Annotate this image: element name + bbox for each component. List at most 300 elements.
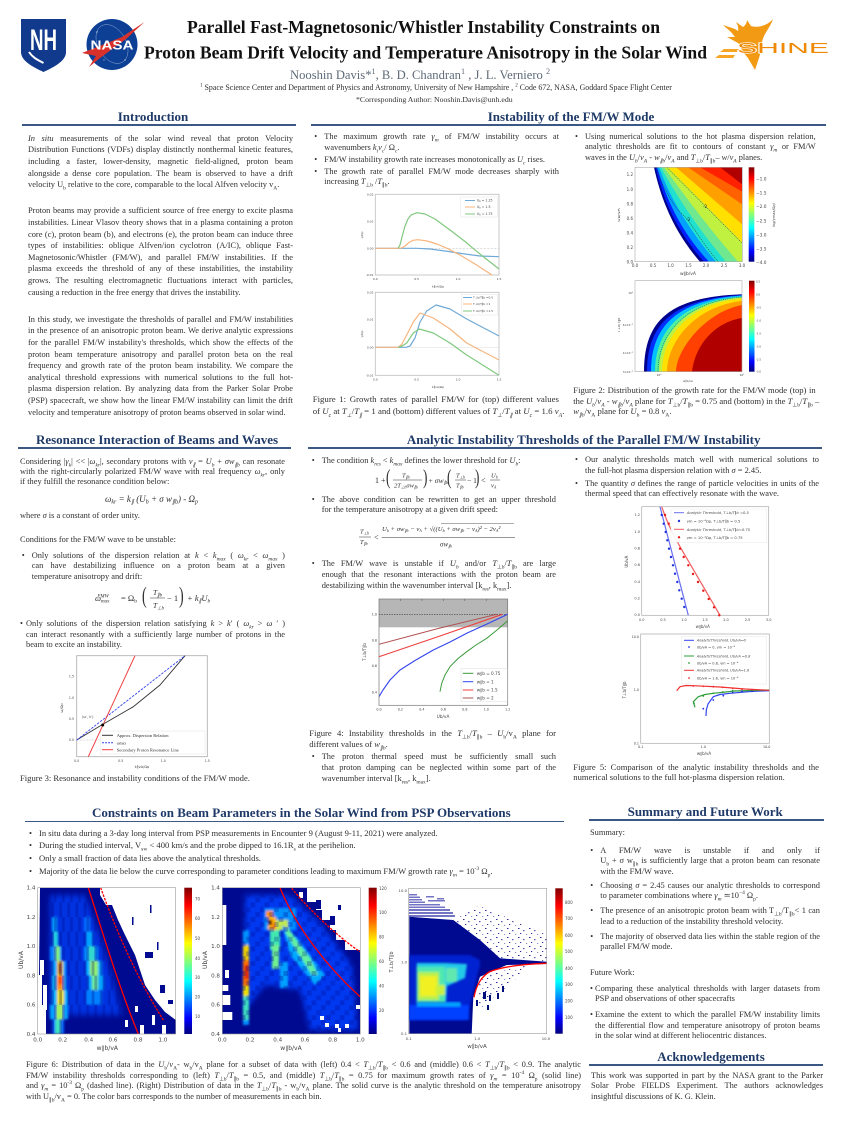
chart: figure 6 middle, 2D histogram: 0.2 (246, 1038, 254, 1044)
plot: anisotropy vs w comparison: 10.0 (763, 745, 770, 749)
formula: omega max: ω (95, 593, 101, 603)
text: k above k-prime bullet: can interact resonantly with a sufficiently large number of protons in the (26, 630, 285, 639)
formula: omega max: b (208, 598, 211, 604)
plot: bottom panel, varying anisotropy: 0.0 (373, 378, 378, 382)
text: future work label: Future Work: (590, 968, 635, 977)
plot: top heat map, Ub vs w: 2.0 (703, 263, 710, 268)
chart: figure 4 instability thresholds: 1.0 (372, 612, 377, 616)
formula: resonance condition: p (194, 500, 198, 506)
formula: resonance condition (105, 494, 198, 506)
formula: omega max: ∥b (157, 592, 163, 598)
text: analytic agreement bullets (576, 455, 819, 498)
formula: upper threshold: T (360, 539, 364, 546)
logo: UNH shield (21, 19, 66, 72)
colorbar: right: 800 (565, 900, 573, 905)
text: thermal speed bullet: that proton damping can be neglected within some part of the (322, 763, 556, 772)
plot: Ub vs w comparison: 0.0 (634, 613, 640, 617)
plot: bottom heat map, anisotropy vs w: 3×10⁻¹ (623, 370, 633, 374)
chart: figure 6 right, 2D histogram: 10.0 (399, 888, 408, 893)
formula: lower threshold: v (491, 482, 494, 490)
caption: figure 2: the Ub/vA - w∥b/vA plane for T⊥b/T∥b = 0.75 and (bottom) in the T⊥b/T∥b – (573, 396, 819, 408)
colorbar: left: 10 (195, 1014, 201, 1019)
formula: omega max: b (134, 598, 137, 604)
text: summary bullets: parallel FM/W mode. (600, 942, 672, 951)
plot: bottom heat map, anisotropy vs w: 0.5 (756, 280, 760, 284)
chart: figure 3 resonance diagram: 1.5 (205, 759, 210, 763)
text: k above k-prime bullet: beam to excite an instability. (26, 640, 122, 649)
plot: bottom panel, varying anisotropy: 0.02 (367, 290, 374, 294)
text: future work bullets: in the solar wind at different heliocentric distances. (595, 1031, 766, 1040)
colorbar: left: 50 (195, 936, 201, 941)
colorbar: left: 30 (195, 975, 201, 980)
text: resonance condition intro (20, 457, 285, 486)
formula: upper threshold: − v (408, 526, 419, 533)
text: this study paragraph (28, 315, 293, 417)
text: proton beams paragraph: grows. The resulting electromagnetic fluctuations interact with particles, (28, 276, 293, 285)
plot: anisotropy vs w comparison: 10.0 (632, 635, 639, 639)
chart: figure 3 resonance diagram: 1.0 (69, 696, 74, 700)
colorbar: middle: 40 (379, 984, 385, 988)
formula: omega max: T (153, 588, 157, 597)
plot: top heat map, Ub vs w: 0.0 (632, 263, 639, 268)
text: resonance condition intro: with the right-circularly polarized FM/W wave with real frequency ωkr, only (20, 467, 285, 478)
curve: solid threshold (280, 888, 360, 997)
formula: lower threshold: b (496, 475, 498, 480)
plot: top panel, varying Uc: 1.0 (456, 277, 460, 281)
caption: figure 2: w∥b/vA plane for Ub = 0.8 vA. (573, 406, 671, 419)
colorbar: right: 300 (565, 982, 573, 987)
histogram body (409, 917, 547, 1034)
plot: top panel, varying Uc: = 1.25 (481, 198, 493, 202)
title (144, 17, 707, 62)
formula: lower threshold: ∥b (414, 485, 418, 490)
chart: figure 3 resonance diagram: ωmax (117, 740, 126, 746)
plot: anisotropy vs w comparison: Ub/vA = 1.6, γm = 10⁻⁴ (697, 676, 739, 680)
curve: omega max (77, 656, 185, 740)
chart: figure 3 resonance diagram (60, 655, 210, 769)
text: analytic agreement bullets: thermal speed that can effectively resonate with the wave. (585, 489, 779, 498)
text: resonance condition intro: if they fulfill the resonance condition below: (20, 477, 169, 486)
plot: Ub vs w comparison (624, 507, 771, 629)
text: growth rate bullets: The growth rate of parallel FM/W mode decreases sharply with (324, 167, 559, 176)
plot: Ub vs w comparison: 1.0 (634, 530, 640, 534)
text: summary bullets: lead to a reduction of the instability threshold velocity. (600, 917, 783, 926)
plot: top heat map, Ub vs w: −1.5 (756, 190, 767, 196)
chart: figure 6 left, 2D histogram: 0.4 (27, 1032, 36, 1038)
plot: top heat map, Ub vs w: 1.0 (667, 263, 674, 268)
text: numerical solutions bullet: analytic thresholds are fit to contours of constant γm or FM/W (585, 142, 816, 154)
stripes and scatter (409, 894, 547, 1012)
plot: bottom heat map, anisotropy vs w: -2.5 (756, 358, 761, 362)
plot: bottom panel, varying anisotropy: k∥vA/Ωp (432, 385, 444, 389)
chart: figure 6 right, 2D histogram: w∥b/vA (467, 1043, 487, 1050)
formula: upper threshold: ∥b (460, 528, 464, 533)
text: k above k-prime bullet (20, 619, 285, 649)
chart: figure 4 instability thresholds: 0.8 (462, 708, 467, 712)
formula: upper threshold: σw (440, 540, 448, 548)
colorbar: right: 600 (565, 933, 573, 938)
formula: lower threshold: T (456, 482, 460, 490)
chart: figure 4 instability thresholds: w∥b = 1 (477, 679, 494, 684)
chart: figure 3 resonance diagram: (ω′, k′) (82, 715, 94, 719)
plot: bottom panel, varying anisotropy: 1.5 (497, 378, 501, 382)
colorbar: right (555, 888, 573, 1034)
plot: bottom heat map, anisotropy vs w: -2.0 (756, 344, 761, 348)
text: future work bullets (595, 984, 820, 1041)
chart: figure 6 left, 2D histogram: 0.0 (33, 1038, 43, 1044)
formula: omega max: max (101, 600, 110, 604)
text: proton beams paragraph: instabilities. Linear Vlasov theory shows that in a plasma containing a proton (28, 218, 293, 227)
plot: Ub vs w comparison: 0.6 (634, 563, 640, 567)
colorbar: middle: 20 (379, 1008, 385, 1013)
text: proton beams paragraph: plasma exceeds the threshold of any of these instabilities, the instability (28, 264, 293, 273)
text: in situ paragraph: In situ measurements of the solar wind reveal that proton Velocity (28, 134, 293, 143)
plot: top heat map, Ub vs w: 0.0 (627, 260, 633, 264)
text: summary bullets: The presence of an anisotropic proton beam with T⊥b/T∥b< 1 can (600, 906, 820, 918)
text: resonance condition intro: Considering |γk| << |ωkr|, secondary protons with v∥ = Ub + σw∥b can resonate (20, 457, 285, 468)
text: PSP bullets (30, 828, 493, 879)
text: growth rate bullets: FM/W instability growth rate increases monotonically as Uc rises. (324, 155, 545, 167)
text: summary bullets: Choosing σ = 2.45 causes our analytic thresholds to correspond (600, 881, 820, 890)
colorbar: middle: 120 (379, 886, 387, 891)
chart: figure 4 instability thresholds: 0.2 (398, 708, 403, 712)
chart: figure 6 middle, 2D histogram: 1.4 (211, 886, 220, 892)
chart: figure 6 right, 2D histogram: 1.0 (474, 1036, 481, 1041)
plot: top heat map, Ub vs w: 1.2 (627, 172, 633, 177)
plot: bottom heat map, anisotropy vs w (617, 280, 761, 383)
text: in situ paragraph: including a faster, lower-density, magnetic field-aligned, proton beam (28, 157, 293, 166)
plot: Ub vs w comparison: 2.5 (745, 618, 750, 622)
chart: figure 3 resonance diagram: ω/Ωp (60, 703, 64, 713)
text: k below kmax bullet: temperature anisotropy and drift: (32, 572, 142, 581)
plot: anisotropy vs w comparison: 0.1 (638, 745, 643, 749)
text: upper threshold bullet (312, 495, 556, 514)
colorbar: middle: 100 (379, 910, 387, 915)
chart: figure 6 left, 2D histogram: 0.4 (84, 1038, 94, 1044)
caption: figure 4: different values of w∥b. (309, 739, 388, 751)
text: thermal speed bullet (312, 752, 556, 786)
corresponding author: *Corresponding Author: Nooshin.Davis@unh.edu (356, 95, 513, 104)
formula: lower threshold (375, 466, 500, 490)
formula: lower threshold: ∥b (444, 480, 449, 485)
plot: top heat map, Ub vs w: −3.5 (756, 246, 767, 252)
plot: top heat map, Ub vs w: 0.5 (650, 263, 657, 268)
curve: analytic threshold (474, 963, 547, 997)
text: this study paragraph: In this study, we investigate the thresholds of parallel and FM/W instabilities (28, 315, 293, 324)
colorbar: right: 200 (565, 998, 573, 1004)
text: proton beams paragraph (28, 206, 293, 297)
chart: figure 3 resonance diagram: 1.0 (161, 759, 166, 763)
plot: anisotropy vs w comparison: w∥b/vA (697, 751, 711, 756)
formula: omega max (95, 584, 211, 612)
plot: bottom panel, varying anisotropy: T⊥b/T∥b =1 (472, 302, 490, 306)
formula: upper threshold (359, 523, 515, 548)
caption: figure 1: Figure 1: Growth rates of parallel FM/W for (top) different values (313, 394, 559, 404)
formula: upper threshold: A (474, 528, 478, 533)
formula: upper threshold: b (443, 528, 445, 533)
formula: resonance condition: ∥b (172, 498, 178, 506)
chart: figure 4 instability thresholds: w∥b = 1.5 (477, 688, 498, 693)
chart: figure 6 left, 2D histogram: 0.8 (134, 1038, 143, 1044)
plot: anisotropy vs w comparison: Ub/vA = 0.8, γm = 10⁻⁴ (697, 661, 739, 665)
text: in situ paragraph: velocity Ub relative to the core, comparable to the local Alfven velocity vA. (28, 180, 279, 192)
text: upper threshold bullet: The above condition can be rewritten to get an upper threshold (322, 495, 556, 504)
plot: top panel, varying Uc: 0.0 (373, 277, 378, 281)
text: in situ paragraph: alongside a dense core population. The beam is observed to have a drift (28, 169, 293, 178)
chart: figure 3 resonance diagram: 0.0 (74, 759, 79, 763)
chart: figure 3 resonance diagram: Secondary Proton Resonance Line (117, 748, 179, 752)
chart: figure 5 analytic vs numerical (622, 506, 772, 756)
formula: lower threshold: 2T (394, 482, 401, 490)
text: summary bullets: A FM/W wave is unstable if and only if (600, 846, 820, 855)
caption: figure 5 (573, 762, 819, 782)
colorbar: left: 40 (195, 956, 201, 961)
chart: figure 6 right, 2D histogram (389, 888, 573, 1050)
formula: omega max: FMW (96, 594, 110, 600)
formula: upper threshold: ² (498, 526, 501, 533)
text: PSP bullets: Majority of the data lie below the curve corresponding to parameter conditions leading to maximum FM/W growth rate γm = 10-3 Ωp. (39, 866, 493, 879)
text: upper threshold bullet: for the temperature anisotropy at a given drift speed: (322, 505, 498, 514)
plot: top heat map, Ub vs w: 2.5 (721, 263, 728, 268)
text: proton beams paragraph: core (c), proton beam (b), and electrons (e), the proton beam can induce three (28, 230, 293, 239)
text: future work bullets: the differential flow and temperature anisotropy of proton beams (595, 1021, 820, 1030)
formula: lower threshold: ⊥b (401, 485, 406, 490)
plot: top panel, varying Uc: U (477, 198, 479, 202)
text: future work bullets: PSP and observations of other spacecrafts (595, 994, 735, 1003)
plot: top panel, varying Uc: 0.5 (414, 277, 419, 281)
colorbar: left: 60 (195, 916, 201, 921)
text: summary bullets (590, 846, 820, 951)
plot: top heat map, Ub vs w: 1.5 (685, 263, 692, 268)
chart: figure 6 middle, 2D histogram: w∥b/vA (280, 1045, 303, 1052)
plot: top heat map, Ub vs w: 3.0 (739, 263, 746, 268)
plot: bottom heat map, anisotropy vs w: -0.5 (756, 306, 761, 310)
chart: figure 6 middle, 2D histogram: 1.0 (356, 1038, 365, 1044)
heading: summary: Summary and Future Work (628, 804, 783, 819)
title: Parallel Fast-Magnetosonic/Whistler Instability Constraints on (187, 17, 660, 37)
plot: bottom heat map, anisotropy vs w: -1.0 (756, 318, 761, 322)
plot: bottom heat map, anisotropy vs w: -1.5 (756, 332, 761, 336)
plot: Ub vs w comparison: Analytic Threshold, T⊥b/T∥b=0.75 (686, 528, 751, 532)
plot: top panel, varying Uc: k∥vA/Ωp (432, 284, 444, 288)
chart: figure 6 middle, 2D histogram: Ub/vA (202, 950, 209, 969)
chart: figure 6 left, 2D histogram: Ub/vA (18, 950, 25, 969)
chart: figure 6 left, 2D histogram: 1.0 (27, 944, 36, 950)
plot: top heat map, Ub vs w: 0.8 (627, 202, 633, 206)
panel: introduction (22, 109, 296, 417)
plot: top heat map, Ub vs w (616, 167, 776, 277)
formula: resonance condition: + σ w (149, 494, 172, 504)
chart: figure 6 left, 2D histogram: 0.6 (27, 1003, 36, 1009)
formula: omega max: + k (187, 593, 199, 603)
plot: top heat map, Ub vs w: -2 (703, 204, 707, 209)
text: unstable wave bullet: The FM/W wave is unstable if Ub and/or T⊥b/T∥b are large (322, 559, 556, 570)
plot: bottom panel, varying anisotropy: 0.00 (367, 346, 374, 350)
logo: SHINE: SHINE (737, 40, 829, 57)
plot: bottom panel, varying anisotropy: 0.5 (414, 378, 419, 382)
plot: top heat map, Ub vs w: 1.0 (627, 187, 633, 192)
plot: top heat map, Ub vs w: −2.0 (756, 204, 767, 210)
formula: lower threshold: < (481, 476, 486, 485)
plot: top panel, varying Uc: b (479, 200, 481, 203)
panel: analytic instability thresholds (308, 432, 822, 786)
chart: figure 6 middle, 2D histogram: 0.4 (273, 1038, 283, 1044)
text: acknowledgements: This work was supported in part by the NASA grant to the Parker (591, 1071, 823, 1080)
chart: figure 6 right, 2D histogram: 10.0 (542, 1036, 551, 1041)
curve: secondary proton resonance line (88, 656, 135, 757)
formula: omega max: = Ω (121, 593, 134, 603)
plot: anisotropy vs w comparison: 1.0 (701, 745, 706, 749)
plot: top panel, varying Uc: b (479, 214, 481, 216)
formula: resonance condition: ) - Ω (177, 494, 195, 504)
text: summary bullets: The majority of observed data lies within the stable region of the (600, 932, 820, 941)
text: this study paragraph: (PSP) spacecraft, we show how the linear FM/W instability can limit the drift (28, 396, 293, 405)
formula: upper threshold: + σw (445, 526, 461, 533)
plot: Ub vs w comparison: 3.0 (766, 618, 771, 622)
formula: upper threshold: )² − 2v (476, 526, 496, 533)
plot: Ub vs w comparison: 0.2 (634, 596, 640, 600)
text: thermal speed bullet: wavenumber interval [kres, kmax]. (322, 774, 431, 786)
formula: lower threshold: 1 + (375, 476, 386, 485)
chart: figure 6 middle, 2D histogram: 0.6 (301, 1038, 310, 1044)
caption: figure 4 (309, 728, 556, 751)
formula: resonance condition: (U (134, 494, 146, 504)
chart: figure 4 instability thresholds: 0.4 (419, 708, 425, 712)
heading: resonance: Resonance Interaction of Beams and Waves (36, 432, 278, 447)
text: growth rate bullets (314, 132, 559, 189)
chart: figure 6 left, 2D histogram: w∥b/vA (97, 1045, 119, 1052)
heading: introduction: Introduction (118, 109, 188, 124)
plot: anisotropy vs w comparison: 1.0 (634, 688, 639, 692)
chart: figure 6 right, 2D histogram: 0.1 (401, 1031, 408, 1036)
panel: summary and future work: • (590, 984, 593, 993)
chart: figure 3 resonance diagram: 1.5 (69, 674, 74, 678)
chart: figure 3 resonance diagram: 0.0 (69, 738, 74, 742)
caption: figure 5: Figure 5: Comparison of the analytic instability thresholds and the (573, 762, 819, 772)
text: acknowledgements: insightful discussions of K. G. Klein. (591, 1092, 716, 1101)
authors: Nooshin Davis*1, B. D. Chandran1 , J. L. Verniero 2 (290, 67, 550, 82)
curve: w = 0.75 (440, 621, 508, 692)
colorbar: middle: 80 (379, 934, 385, 940)
caption: figure 1 (313, 394, 564, 418)
chart: figure 6 middle, 2D histogram: 0.4 (211, 1032, 220, 1038)
colorbar: left (184, 888, 201, 1034)
chart: figure 6 middle, 2D histogram (202, 886, 387, 1052)
chart: figure 4 instability thresholds: 1.2 (505, 708, 510, 712)
plot: top panel, varying Uc: = 1.5 (481, 205, 491, 209)
plot: bottom heat map, anisotropy vs w: w∥b/vA (683, 379, 693, 383)
formula: lower threshold: T (456, 472, 460, 480)
plot: bottom panel, varying anisotropy (360, 290, 501, 389)
curve: w = 1.5 (379, 614, 502, 657)
formula: omega max: − 1 (167, 593, 178, 603)
formula: lower threshold: U (491, 472, 496, 480)
chart: figure 6 right, 2D histogram: T⊥b/T∥b (389, 952, 395, 974)
affiliations: 1 Space Science Center and Department of Physics and Astronomy, University of New Hampshire , 2 Code 672, NASA, Goddard Space Flight Center (200, 83, 672, 92)
text: sigma note: where σ is a constant of order unity. (20, 511, 140, 520)
formula: upper threshold: U (382, 526, 387, 533)
formula: lower threshold: + σw (428, 476, 444, 485)
formula: omega max: ∥ (199, 598, 203, 604)
text: kres bullet: The condition kres < kmax defines the lower threshold for Ub: (322, 456, 520, 468)
text: this study paragraph: analytical threshold expressions with numerical solutions to the full hot- (28, 373, 293, 382)
plot: Ub vs w comparison: 0.0 (639, 618, 644, 622)
text: numerical solutions bullet: waves in the Ub/vA - w∥b/vA and T⊥b/T∥b– w/vA planes. (585, 153, 762, 164)
formula: upper threshold: A (495, 528, 499, 533)
panel: resonance interaction (18, 432, 291, 783)
plot: top panel, varying Uc: U (477, 212, 479, 216)
plot: Ub vs w comparison: γm = 10⁻⁴Ωp, T⊥b/T∥b = 0.75 (687, 536, 743, 540)
formula: upper threshold: − v (464, 526, 475, 533)
text: analytic agreement bullets: Our analytic thresholds match well with numerical solutions to (585, 455, 819, 464)
plot: Ub vs w comparison: 0.4 (634, 580, 641, 584)
plot: Ub vs w comparison: 0.8 (634, 546, 640, 550)
chart: figure 4 instability thresholds: w∥b = 0.75 (477, 671, 501, 676)
colorbar: middle: 60 (379, 959, 385, 964)
formula: upper threshold: ⊥b (364, 531, 369, 536)
plot: bottom heat map, anisotropy vs w: 10⁰ (628, 291, 634, 295)
chart: figure 4 instability thresholds: w∥b = 2 (477, 696, 494, 701)
caption: figure 4: Figure 4: Instability thresholds in the T⊥b/T∥b – Ub/vA plane for (309, 728, 556, 740)
plot: bottom heat map, anisotropy vs w: 10¹ (740, 373, 744, 377)
formula: resonance condition: ω (105, 494, 111, 504)
panel: instability of the FM/W mode (311, 109, 826, 419)
caption: figure 6 (26, 1060, 581, 1103)
text: k below kmax bullet: can have destabilizing influence on a proton beam at a given (32, 561, 285, 570)
formula: upper threshold: + σw (389, 526, 405, 533)
text: k below kmax bullet: Only solutions of the dispersion relation at k < kmax ( ωkr < ωmax ) (32, 551, 285, 563)
chart: figure 4 instability thresholds: Ub/vA (437, 714, 449, 720)
formula: lower threshold: ⊥b (460, 475, 465, 480)
caption: figure 5: numerical solutions to the full hot-plasma dispersion relation. (573, 772, 785, 782)
text: summary label: Summary: (590, 828, 625, 837)
caption: figure 2: Figure 2: Distribution of the growth rate for the FM/W mode (top) in (573, 385, 816, 395)
plot: top heat map, Ub vs w: log(γmax/Ωp) (772, 202, 776, 227)
plot: Ub vs w comparison: γm = 10⁻⁴Ωp, T⊥b/T∥b = 0.5 (687, 520, 741, 524)
text: this study paragraph: for the parallel FM/W instability's thresholds, which show the effects of the (28, 338, 293, 347)
text: proton beams paragraph: Magnetosonic/Whistler (FM/W), and parallel FM/W instabilities. If the (28, 253, 293, 262)
colorbar: right: 500 (565, 949, 573, 954)
chart: figure 3 resonance diagram: Approx. Dispersion Relation (117, 733, 169, 738)
text: k above k-prime bullet: Only solutions of the dispersion relation satisfying k > k′ ( ωkr > ω ′ ) (26, 619, 285, 631)
chart: figure 6 middle, 2D histogram: 0.8 (328, 1038, 338, 1044)
caption: figure 6: and γm = 10-3 Ωp (dashed line). (Right) Distribution of data in the T⊥b/T∥b - wb/vA plane. The solid curve is the analytic threshold on the temperature anisotropy (26, 1080, 581, 1093)
formula: upper threshold: ∥b (404, 528, 408, 533)
text: conditions heading: Conditions for the FM/W wave to be unstable: (20, 535, 176, 544)
text: future work bullets: Comparing these analytical thresholds with larger datasets from (595, 984, 820, 993)
text: growth rate bullets: increasing T⊥b /T∥b. (324, 177, 390, 189)
plot: top panel, varying Uc: 1.5 (497, 277, 501, 281)
plot: bottom heat map, anisotropy vs w: 10⁰ (657, 373, 662, 377)
formula: omega max: ⊥b (157, 606, 165, 612)
plot: bottom panel, varying anisotropy: -0.01 (366, 374, 374, 378)
text: numerical solutions bullet: Using numerical solutions to the hot plasma dispersion relation, (585, 132, 816, 141)
plot: Ub vs w comparison: 0.5 (660, 618, 666, 622)
chart: figure 6 middle, 2D histogram: 0.0 (218, 1038, 227, 1044)
text: PSP bullets: In situ data during a 3-day long interval from PSP measurements in Encounter 9 (August 9-11, 2021) were analyzed. (39, 828, 438, 838)
text: this study paragraph: proton beam temperature anisotropy and parallel proton beta on the real (28, 350, 293, 359)
curve: dashed threshold (292, 888, 360, 952)
text: proton beams paragraph: causing a reduction in the free energy that drives the instability. (28, 288, 241, 297)
plot: top heat map, Ub vs w: 0.6 (627, 216, 633, 221)
chart: figure 4 instability thresholds: T⊥b/T∥b (362, 643, 368, 662)
plot: bottom heat map, anisotropy vs w: 6×10⁻¹ (623, 323, 633, 327)
header banner (21, 17, 829, 104)
plot: top heat map, Ub vs w: w∥b/vA (680, 271, 697, 277)
formula: omega max: T (153, 601, 157, 610)
text: PSP bullets: Only a small fraction of data lies above the analytical thresholds. (39, 853, 261, 863)
chart: figure 2 growth rate heat maps (618, 167, 776, 383)
